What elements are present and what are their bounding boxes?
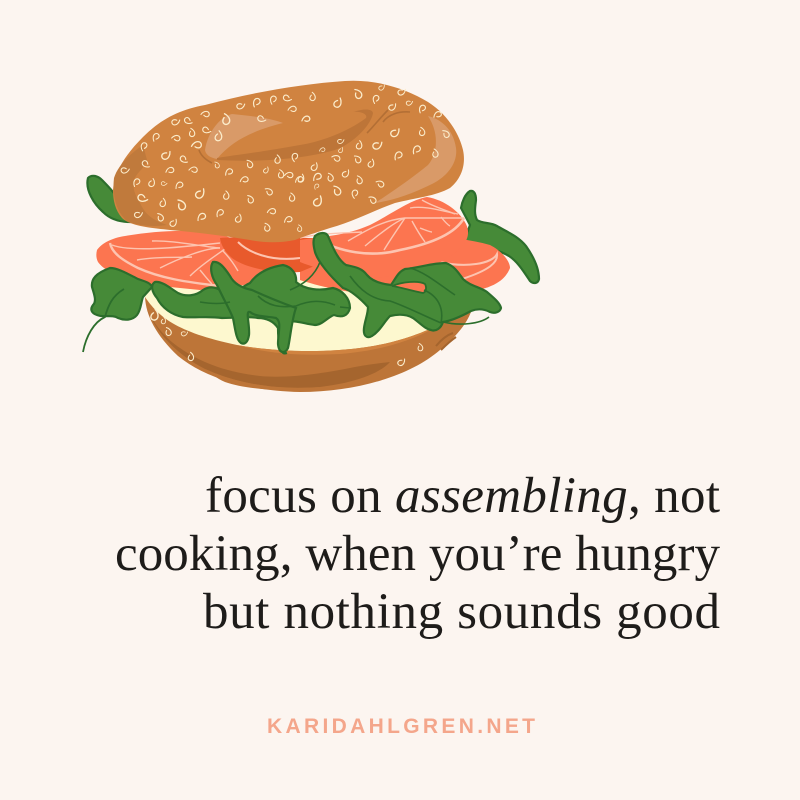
top bagel half — [113, 81, 464, 242]
left salmon veins — [110, 241, 238, 286]
left salmon slice — [96, 231, 290, 290]
quote text: but nothing sounds good — [203, 584, 720, 640]
bagel rim highlight — [237, 322, 445, 355]
illustration: bagel sandwich — [83, 81, 539, 392]
back left leaf — [87, 176, 130, 222]
bottom bagel half — [145, 280, 472, 392]
right salmon slice lower — [300, 237, 510, 297]
cream cheese — [145, 270, 445, 351]
left front leaf with stem — [91, 268, 152, 320]
sesame seeds right — [298, 83, 450, 207]
leaf hole — [392, 282, 426, 293]
top bagel highlight left — [205, 114, 283, 159]
website footer: KARIDAHLGREN.NET — [267, 715, 535, 738]
tomato rind line — [238, 242, 322, 259]
bottom bagel lower rim — [205, 369, 320, 390]
tomato slice — [220, 237, 324, 272]
right salmon slice upper — [300, 197, 468, 277]
middle leaf — [152, 265, 350, 353]
top bagel left shadow — [114, 145, 167, 226]
salmon lower slice vein — [440, 254, 497, 279]
bottom bagel dark shading — [147, 310, 390, 388]
middle leaf drip — [211, 262, 296, 352]
top bagel highlight right — [375, 116, 456, 203]
left leaf stem and rib — [83, 289, 124, 352]
top bagel dimple fold — [217, 110, 373, 161]
quote text: cooking, when you’re hungry — [115, 526, 720, 582]
bottom bagel crease marks — [436, 333, 456, 350]
quote text — [115, 468, 720, 640]
bottom bagel seeds — [151, 309, 194, 361]
bottom bagel seeds right — [397, 343, 424, 367]
right salmon veins — [300, 200, 464, 254]
back right leaf — [461, 191, 539, 283]
sesame seeds — [120, 95, 311, 232]
big leaf ribs and tendril — [340, 268, 489, 324]
fold crease lines — [199, 110, 410, 163]
middle leaf ribs — [200, 262, 335, 307]
big right leaf — [314, 233, 501, 337]
quote text: focus on assembling, not — [205, 468, 720, 524]
